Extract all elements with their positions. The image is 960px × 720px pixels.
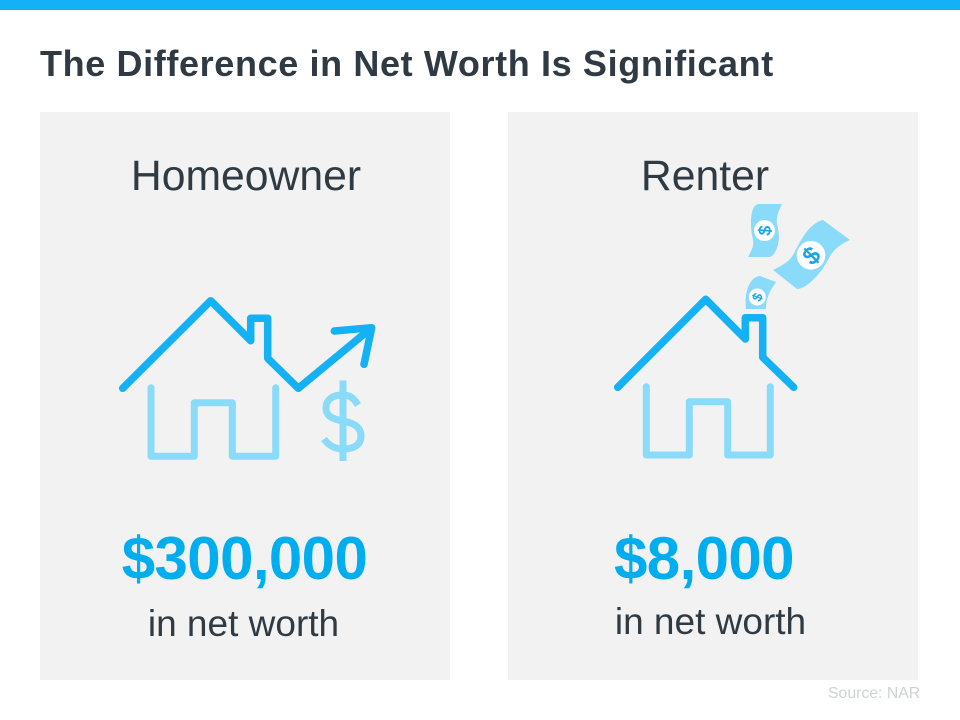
caption: homeowner: in net worth: [148, 603, 339, 644]
banknote: top: [748, 204, 782, 257]
heading: renter: Renter: [641, 152, 769, 200]
panel: renter: [508, 112, 918, 680]
roof and chimney: [618, 299, 794, 387]
icon: house with rising arrow and dollar sign: [118, 297, 376, 461]
house walls and door: [151, 388, 276, 456]
banknote: small: $: [749, 290, 766, 303]
caption: renter: in net worth: [615, 601, 806, 642]
banknote: top: $: [755, 224, 775, 236]
panel: homeowner: [40, 112, 450, 680]
title: The Difference in Net Worth Is Significant: [40, 43, 774, 84]
heading: homeowner: Homeowner: [131, 152, 361, 200]
banknote: small: [746, 276, 776, 309]
icon: house with money flying from chimney: [614, 204, 850, 458]
source note: Source: NAR: [828, 685, 920, 702]
value: homeowner net worth: $300,000: [122, 525, 367, 592]
roof line turning into arrow: [123, 301, 372, 388]
house walls and door: [646, 387, 770, 455]
top accent bar: [0, 0, 960, 10]
banknote: large: $: [798, 242, 826, 270]
value: renter net worth: $8,000: [614, 525, 794, 592]
banknote: large: [773, 220, 850, 289]
dollar sign: [324, 380, 361, 461]
